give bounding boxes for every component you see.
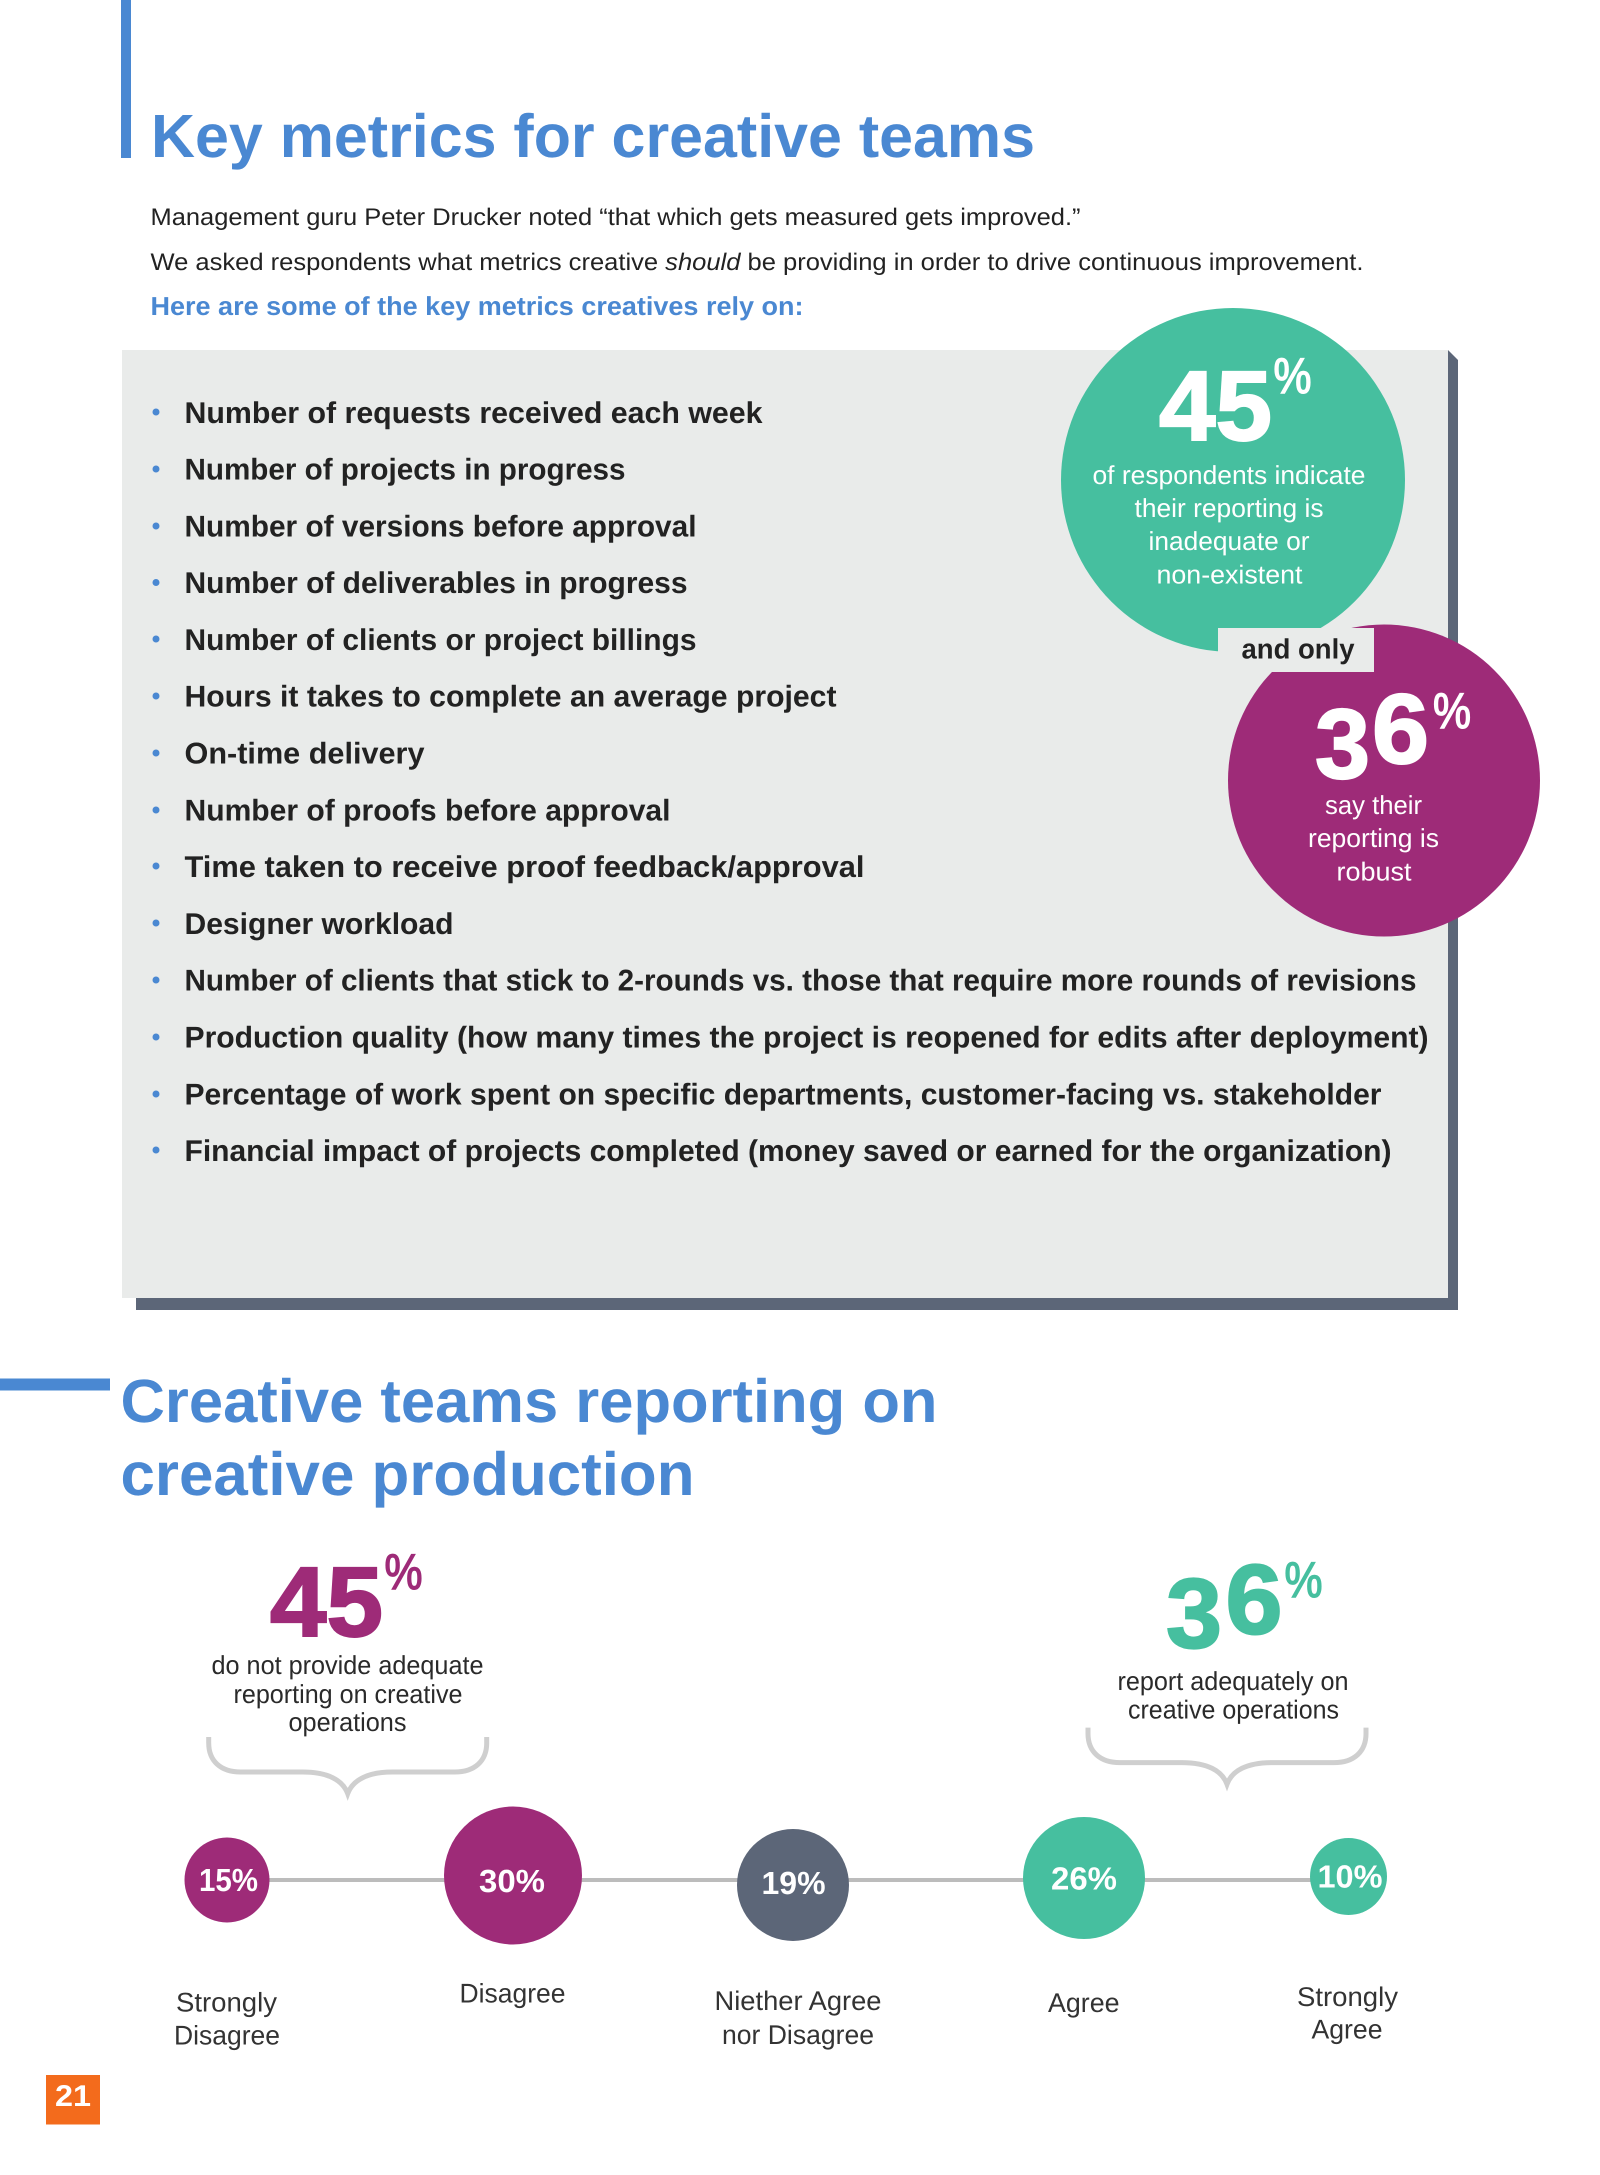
stat: 36 percent adequate: report adequately on (1118, 1666, 1348, 1696)
stat: 45 percent not adequate: % (384, 1544, 422, 1600)
bullet list of metrics (152, 397, 1428, 1168)
bullet list of metrics: Number of requests received each week (184, 397, 763, 430)
callout: 36 percent robust reporting: say their (1325, 790, 1422, 820)
label: strongly agree (1297, 1982, 1398, 2044)
bullet list of metrics: On-time delivery (184, 738, 425, 770)
accent bar: second heading (0, 1378, 110, 1390)
panel: key metrics list (122, 350, 1458, 1310)
bullet list of metrics: Number of deliverables in progress (184, 567, 688, 600)
bubble: strongly agree 10%: 10% (1318, 1858, 1382, 1894)
bubble: strongly agree 10% (1310, 1838, 1387, 1915)
label: strongly agree: Strongly (1297, 1982, 1398, 2012)
callout: 36 percent robust reporting: robust (1336, 856, 1412, 886)
bubble: neither 19% (737, 1829, 849, 1941)
title: key metrics: Key metrics for creative teams (151, 102, 1035, 170)
bubble: disagree 30% (444, 1806, 582, 1944)
bullet list of metrics: Number of clients that stick to 2-rounds vs. those that require more rounds of revisions (184, 965, 1416, 998)
heading: creative teams reporting: Creative teams reporting on (120, 1367, 938, 1435)
bullet list of metrics: Number of projects in progress (184, 454, 626, 486)
label: neither agree nor disagree (714, 1986, 882, 2050)
stat: 36 percent adequate: % (1284, 1552, 1322, 1608)
stat: 45 percent not adequate: reporting on creative (234, 1679, 462, 1709)
stat: 36 percent adequate: creative operations (1128, 1694, 1339, 1724)
brace: disagree group (209, 1737, 487, 1794)
label: neither agree nor disagree: Niether Agree (714, 1986, 882, 2016)
callout: 45 percent inadequate reporting: % (1274, 348, 1312, 404)
callout: 45 percent inadequate reporting: their reporting is (1134, 493, 1324, 523)
bullet list of metrics: Percentage of work spent on specific departments, customer-facing vs. stakeholder (184, 1078, 1382, 1111)
callout: 45 percent inadequate reporting: 45 (1159, 350, 1272, 461)
scale: agreement bubble chart (184, 1806, 1387, 1944)
accent bar: top heading (121, 0, 131, 158)
callout: 45 percent inadequate reporting: of respondents indicate (1092, 460, 1366, 490)
bullet list of metrics: Time taken to receive proof feedback/approval (184, 851, 865, 884)
heading: creative teams reporting: creative production (120, 1440, 694, 1508)
intro text block (150, 204, 1364, 321)
brace: agree group (1088, 1728, 1366, 1784)
bubble: disagree 30%: 30% (479, 1863, 545, 1899)
label: agree: Agree (1048, 1988, 1120, 2018)
label: strongly disagree: Disagree (174, 2020, 280, 2050)
callout: 36 percent robust reporting: reporting is (1308, 823, 1439, 853)
bubble: strongly disagree 15%: 15% (199, 1862, 258, 1898)
page number: 21 (55, 2080, 91, 2113)
page number (46, 2075, 100, 2124)
stat: 45 percent not adequate (212, 1544, 484, 1737)
callout: 36 percent robust reporting (1228, 624, 1540, 936)
bullet list of metrics: Production quality (how many times the project is reopened for edits after deployment) (184, 1022, 1428, 1054)
bullet list of metrics: Number of versions before approval (184, 510, 696, 543)
intro text block: Management guru Peter Drucker noted “that which gets measured gets improved.” (150, 204, 1081, 231)
bubble: agree 26%: 26% (1051, 1860, 1117, 1896)
bullet list of metrics: Designer workload (184, 908, 454, 941)
intro text block: Here are some of the key metrics creatives rely on: (150, 291, 804, 321)
label: strongly agree: Agree (1312, 2014, 1382, 2044)
label: neither agree nor disagree: nor Disagree (722, 2020, 874, 2050)
callout: 36 percent robust reporting: % (1433, 683, 1471, 739)
stat: 45 percent not adequate: operations (288, 1707, 406, 1737)
intro text block: We asked respondents what metrics creative should be providing in order to drive continuous improvement. (150, 249, 1364, 276)
bullet list of metrics: Financial impact of projects completed (money saved or earned for the organization) (184, 1135, 1392, 1168)
label: strongly disagree (174, 1988, 280, 2050)
stat: 45 percent not adequate: do not provide adequate (212, 1650, 484, 1680)
bullet list of metrics: Hours it takes to complete an average project (184, 681, 837, 714)
label: disagree: Disagree (460, 1978, 566, 2008)
label: and only (1218, 628, 1374, 672)
stat: 45 percent not adequate: 45 (270, 1546, 383, 1657)
callout: 45 percent inadequate reporting: inadequate or (1148, 526, 1310, 556)
callout: 45 percent inadequate reporting: non-existent (1156, 560, 1303, 590)
heading: creative teams reporting (120, 1367, 938, 1508)
bullet list of metrics: Number of clients or project billings (184, 624, 696, 657)
bubble: agree 26% (1023, 1817, 1145, 1939)
stat: 36 percent adequate (1118, 1544, 1348, 1724)
stat: 36 percent adequate: 3 (1166, 1558, 1222, 1668)
label: strongly disagree: Strongly (176, 1988, 277, 2018)
callout: 45 percent inadequate reporting (1061, 308, 1405, 652)
callout: 36 percent robust reporting: 3 (1315, 688, 1370, 799)
callout: 36 percent robust reporting: 6 (1372, 673, 1429, 784)
stat: 36 percent adequate: 6 (1226, 1544, 1282, 1654)
label: and only: and only (1242, 634, 1355, 664)
bullet list of metrics: Number of proofs before approval (184, 794, 670, 827)
bubble: strongly disagree 15% (184, 1838, 270, 1922)
bubble: neither 19%: 19% (762, 1865, 826, 1901)
